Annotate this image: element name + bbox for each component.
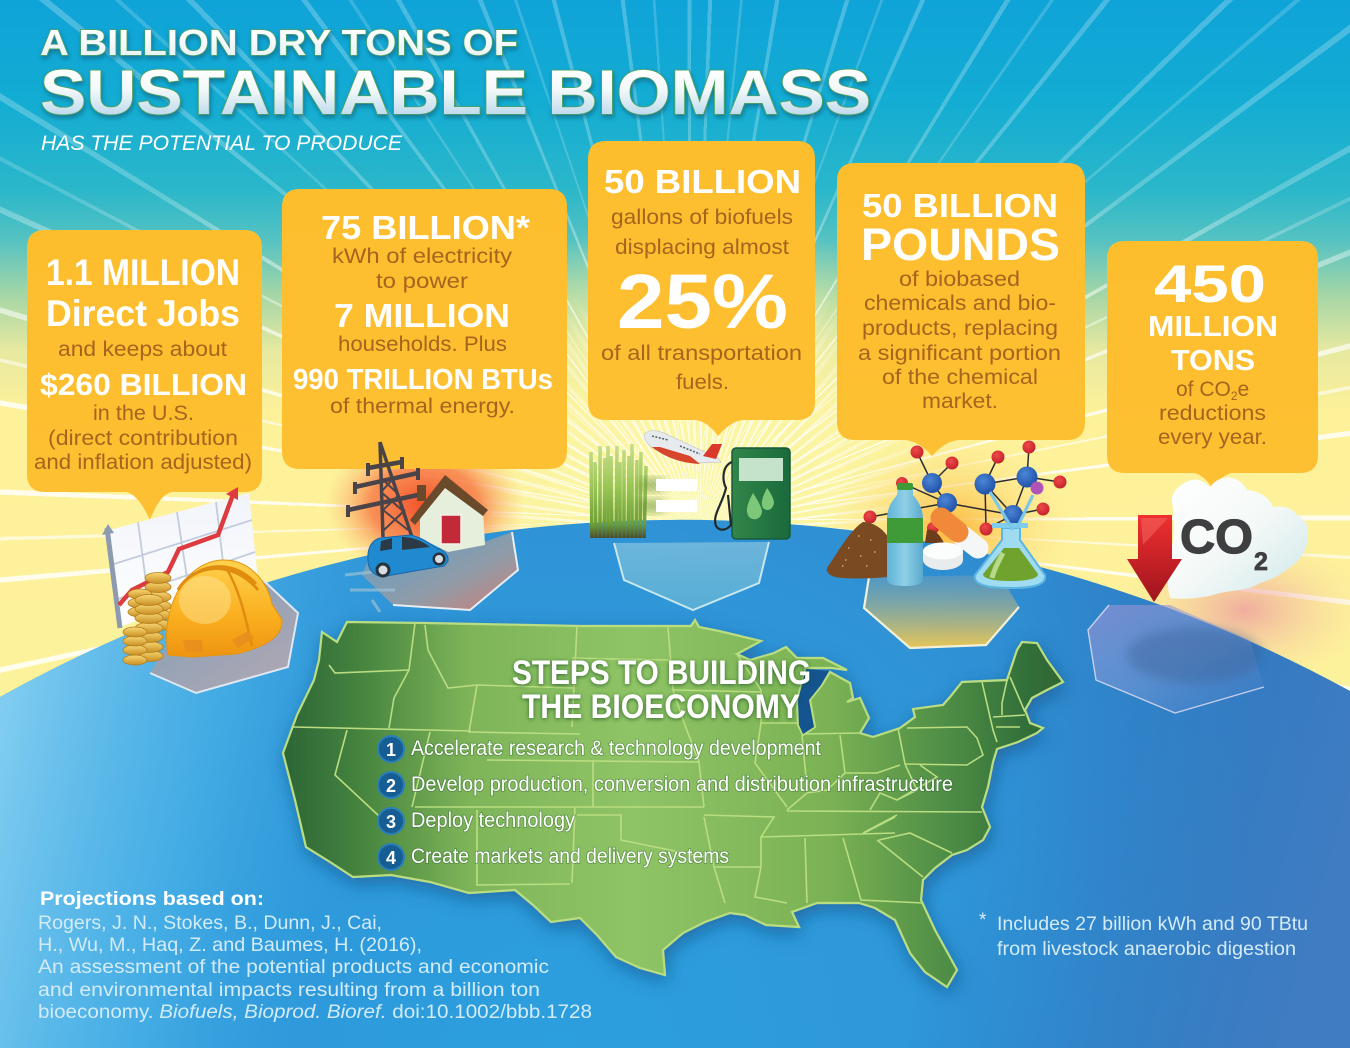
hexagon: biofuels reflection bbox=[614, 542, 769, 610]
hexagon: electricity reflection bbox=[345, 532, 518, 612]
icon: power tower, house and car bbox=[348, 442, 488, 578]
heading: steps to building the bioeconomy: THE BIOECONOMY bbox=[522, 688, 800, 726]
icon: grass equals fuel with airplane bbox=[591, 431, 790, 539]
footnote: from livestock anaerobic digestion bbox=[997, 939, 1296, 960]
text block: projections and citation: H., Wu, M., Haq, Z. and Baumes, H. (2016), bbox=[38, 935, 422, 956]
panel: CO2 reductions: MILLION bbox=[1148, 311, 1278, 343]
panel: CO2 reductions: reductions bbox=[1159, 402, 1266, 425]
icon glow: pink behind CO2 cloud bbox=[1120, 535, 1350, 685]
chart paper bbox=[109, 493, 258, 627]
step 2: 2 bbox=[386, 776, 396, 796]
text block: projections and citation: An assessment of the potential products and economic bbox=[38, 957, 549, 978]
panel: jobs: in the U.S. bbox=[93, 402, 194, 425]
panel: electricity: 7 MILLION bbox=[334, 297, 510, 334]
car bbox=[368, 535, 448, 577]
icon: CO2 cloud and down arrow bbox=[1127, 477, 1308, 602]
panel: biofuels: of all transportation bbox=[601, 342, 802, 365]
step 4: Create markets and delivery systems bbox=[411, 845, 729, 868]
text block: projections and citation: bioeconomy. Biofuels, Bioprod. Bioref. doi:10.1002/bbb.1728 bbox=[38, 1002, 592, 1023]
panel: CO2 reductions: 2 bbox=[1231, 389, 1238, 403]
panel: electricity: of thermal energy. bbox=[330, 395, 515, 418]
step 3: 3 bbox=[386, 812, 396, 832]
molecule bonds bbox=[870, 447, 1060, 529]
panel: jobs: (direct contribution bbox=[48, 427, 238, 450]
icon: CO2 cloud and down arrow: 2 bbox=[1254, 548, 1268, 576]
panel: jobs: 1.1 MILLION bbox=[46, 252, 240, 293]
icon glow: orange behind power tower and house bbox=[325, 433, 525, 577]
panel: electricity: kWh of electricity bbox=[332, 245, 513, 268]
panel: CO2 reductions: every year. bbox=[1158, 426, 1267, 449]
panel: chemicals: chemicals and bio- bbox=[864, 292, 1056, 315]
map: United States bbox=[283, 620, 1063, 987]
chart axis bbox=[107, 528, 120, 628]
panel: CO2 reductions bbox=[1107, 241, 1318, 488]
panel: biofuels: 25% bbox=[617, 259, 788, 345]
panel: biofuels: displacing almost bbox=[615, 236, 789, 259]
text block: projections and citation: Projections based on: bbox=[40, 889, 264, 910]
step 1: 1 bbox=[386, 740, 396, 760]
step 1: Accelerate research & technology development bbox=[411, 737, 821, 760]
CO2 label: CO bbox=[1180, 511, 1253, 564]
icon: molecules and bio-products bbox=[827, 440, 1066, 588]
panel: electricity: to power bbox=[376, 270, 468, 293]
title line 2: SUSTAINABLE BIOMASS bbox=[40, 58, 871, 128]
panel: jobs bbox=[27, 230, 262, 520]
hard hat bbox=[167, 560, 282, 657]
power tower bbox=[348, 442, 418, 537]
capsule bbox=[941, 518, 978, 548]
step 2: Develop production, conversion and distribution infrastructure bbox=[411, 773, 953, 796]
panel: chemicals: 50 BILLION bbox=[862, 187, 1058, 224]
flask bbox=[975, 492, 1045, 588]
fuel pump bbox=[732, 448, 790, 539]
panel: biofuels: 50 BILLION bbox=[604, 163, 801, 200]
heading: steps to building the bioeconomy: STEPS TO BUILDING bbox=[512, 654, 811, 692]
down arrow bbox=[1127, 515, 1182, 602]
hexagon: jobs reflection bbox=[150, 580, 298, 693]
coins bbox=[123, 572, 171, 665]
panel: jobs: Direct Jobs bbox=[46, 293, 240, 334]
panel: jobs: and inflation adjusted) bbox=[34, 451, 252, 474]
subtitle: HAS THE POTENTIAL TO PRODUCE bbox=[41, 132, 403, 155]
panel: chemicals: of the chemical bbox=[882, 366, 1038, 389]
title line 1: A BILLION DRY TONS OF bbox=[40, 22, 518, 63]
panel: electricity: households. Plus bbox=[338, 333, 507, 356]
step 4: 4 bbox=[386, 848, 396, 868]
panel: biofuels bbox=[588, 141, 815, 436]
panel: CO2 reductions: of CO bbox=[1176, 378, 1231, 401]
panel: chemicals: products, replacing bbox=[862, 317, 1058, 340]
icon glow: amber behind chemicals bbox=[825, 435, 1075, 625]
panel: CO2 reductions: 450 bbox=[1154, 255, 1266, 314]
red rising line bbox=[119, 492, 234, 605]
panel: chemicals: a significant portion bbox=[858, 342, 1061, 365]
heading: steps to building the bioeconomy bbox=[512, 654, 811, 726]
Lake Michigan bbox=[798, 669, 829, 734]
panel: electricity bbox=[282, 189, 567, 469]
panel: jobs: and keeps about bbox=[58, 338, 227, 361]
panel: chemicals: of biobased bbox=[899, 268, 1020, 291]
tablet bbox=[923, 542, 963, 570]
cloud bbox=[1168, 477, 1308, 599]
airplane bbox=[644, 431, 722, 464]
footnote bbox=[979, 910, 1308, 960]
panel: chemicals: market. bbox=[922, 390, 998, 413]
footnote: Includes 27 billion kWh and 90 TBtu bbox=[997, 914, 1308, 935]
switchgrass bbox=[591, 444, 646, 538]
bottle bbox=[887, 487, 923, 586]
equals sign bbox=[640, 479, 697, 512]
molecule nodes bbox=[922, 466, 1038, 525]
panel: CO2 reductions: TONS bbox=[1171, 345, 1255, 377]
panel: chemicals bbox=[837, 163, 1085, 456]
text block: projections and citation: Rogers, J. N., Stokes, B., Dunn, J., Cai, bbox=[38, 913, 382, 934]
cloud reflection bbox=[1127, 627, 1263, 683]
house bbox=[420, 485, 485, 552]
hexagon: chemicals reflection bbox=[864, 575, 1019, 648]
text block: projections and citation bbox=[38, 889, 592, 1023]
panel: electricity: 990 TRILLION BTUs bbox=[293, 364, 553, 396]
panel: CO2 reductions: e bbox=[1238, 378, 1249, 401]
panel: jobs: $260 BILLION bbox=[40, 367, 247, 402]
panel: biofuels: gallons of biofuels bbox=[611, 206, 793, 229]
step 3: Deploy technology bbox=[411, 809, 575, 832]
biomass soil mound bbox=[827, 522, 888, 578]
steps list bbox=[378, 736, 953, 870]
panel: biofuels: fuels. bbox=[676, 371, 729, 394]
text block: projections and citation: and environmental impacts resulting from a billion ton bbox=[38, 980, 540, 1001]
panel: electricity: 75 BILLION* bbox=[321, 209, 530, 246]
globe bbox=[0, 520, 1350, 1048]
title bbox=[40, 22, 871, 128]
panel: chemicals: POUNDS bbox=[861, 219, 1060, 270]
hexagon: CO2 reflection bbox=[1088, 605, 1264, 713]
icon: growth chart, coins and hard hat bbox=[102, 487, 282, 665]
footnote: * bbox=[979, 910, 987, 931]
